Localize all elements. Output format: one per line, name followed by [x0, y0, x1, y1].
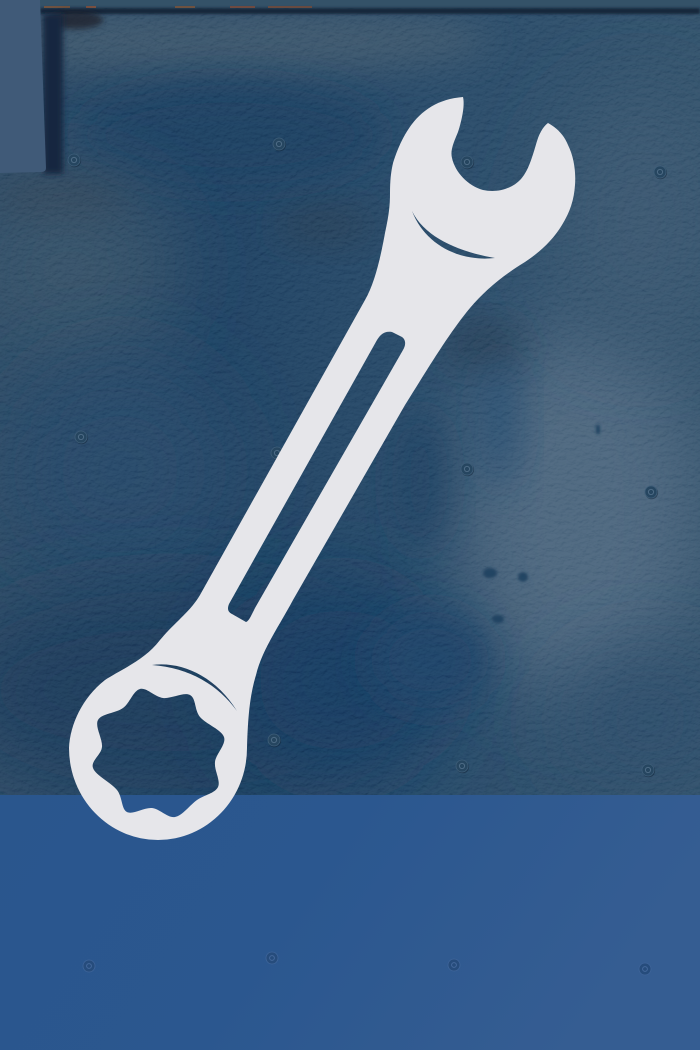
bolts: panel rivets — [68, 138, 667, 975]
icon: white wrench — [69, 97, 575, 840]
corner block: top-left board — [0, 0, 46, 173]
panel: brighter lower blue band — [0, 795, 700, 1050]
shadow beside corner block — [43, 14, 63, 174]
top strip: wooden trim — [40, 0, 700, 29]
wrench body with jaw, slot, crescents and ring hole — [69, 97, 575, 840]
paint marks: small dark spots — [483, 425, 600, 623]
panel: dark upper painted wall — [0, 0, 700, 795]
